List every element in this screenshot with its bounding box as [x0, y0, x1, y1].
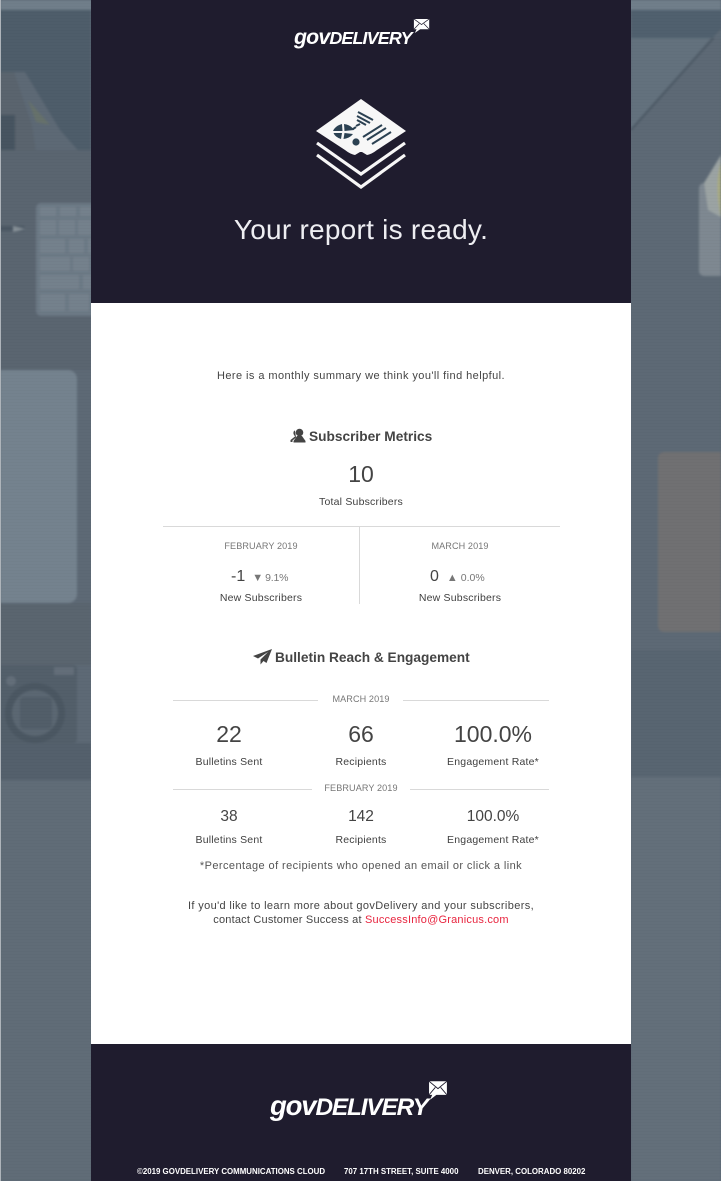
title: Your report is ready. [234, 214, 488, 245]
stat: bulletins sent february [195, 808, 263, 846]
logo: govdelivery header [294, 19, 430, 49]
new subscribers value: 0 ▲ 0.0% [430, 568, 485, 585]
stat: engagement rate march [447, 721, 539, 768]
logo: govdelivery header: govDELIVERY [294, 25, 412, 49]
stat: recipients march [335, 721, 387, 768]
contact text [188, 900, 534, 926]
footer address: ©2019 GOVDELIVERY COMMUNICATIONS CLOUD [137, 1167, 325, 1176]
tablet [0, 370, 77, 603]
intro text: Here is a monthly summary we think you'll find helpful. [217, 370, 505, 382]
stat: recipients february: 142 [348, 808, 374, 825]
stat: engagement rate february: Engagement Rate* [447, 834, 539, 846]
footer address: 707 17TH STREET, SUITE 4000 [344, 1167, 458, 1176]
stat: bulletins sent march: Bulletins Sent [195, 756, 263, 768]
new subscribers value: -1 ▼9.1% [231, 568, 288, 585]
stat: engagement rate march: Engagement Rate* [447, 756, 539, 768]
stat: bulletins sent march: 22 [216, 721, 242, 747]
icon: users [290, 428, 306, 442]
panel: white content [91, 303, 631, 1044]
heading: bulletin reach: Bulletin Reach & Engagement [275, 650, 470, 665]
logo: govdelivery footer: govDELIVERY [270, 1090, 428, 1121]
footer address: DENVER, COLORADO 80202 [478, 1167, 585, 1176]
month label: MARCH 2019 [431, 541, 489, 551]
right side [631, 10, 721, 38]
footer address [137, 1167, 586, 1176]
month label: february: FEBRUARY 2019 [324, 783, 398, 793]
keyboard [36, 203, 96, 316]
stat: recipients february: Recipients [335, 834, 387, 846]
panel: footer [91, 1044, 631, 1181]
stat: bulletins sent march [195, 721, 263, 768]
icon: report stack [316, 99, 406, 189]
heading: subscriber metrics: Subscriber Metrics [309, 429, 432, 444]
stat: engagement rate february: 100.0% [467, 808, 519, 825]
month label: march: MARCH 2019 [332, 694, 390, 704]
total subscribers value: 10 [348, 461, 374, 487]
contact text: contact Customer Success at SuccessInfo@Granicus.com [213, 914, 509, 926]
total subscribers label: Total Subscribers [319, 496, 403, 508]
icon: paper plane [253, 649, 272, 664]
stat: recipients march: Recipients [335, 756, 387, 768]
panel: subscriber metrics [163, 428, 560, 604]
month label: FEBRUARY 2019 [224, 541, 298, 551]
february column [220, 541, 302, 604]
panel: bulletin reach and engagement [173, 649, 549, 872]
new subscribers label: New Subscribers [419, 592, 501, 604]
panel: header [91, 0, 631, 303]
footnote: *Percentage of recipients who opened an email or click a link [200, 860, 522, 872]
stat: engagement rate march: 100.0% [454, 721, 532, 747]
left edge line [0, 0, 1, 1181]
stat: bulletins sent february: 38 [220, 808, 238, 825]
logo: govdelivery footer [270, 1081, 447, 1121]
new subscribers label: New Subscribers [220, 592, 302, 604]
march column [419, 541, 501, 604]
stat: recipients march: 66 [348, 721, 374, 747]
stat: bulletins sent february: Bulletins Sent [195, 834, 263, 846]
camera [0, 665, 77, 743]
contact text: If you'd like to learn more about govDelivery and your subscribers, [188, 900, 534, 912]
stat: recipients february [335, 808, 387, 846]
stat: engagement rate february [447, 808, 539, 846]
